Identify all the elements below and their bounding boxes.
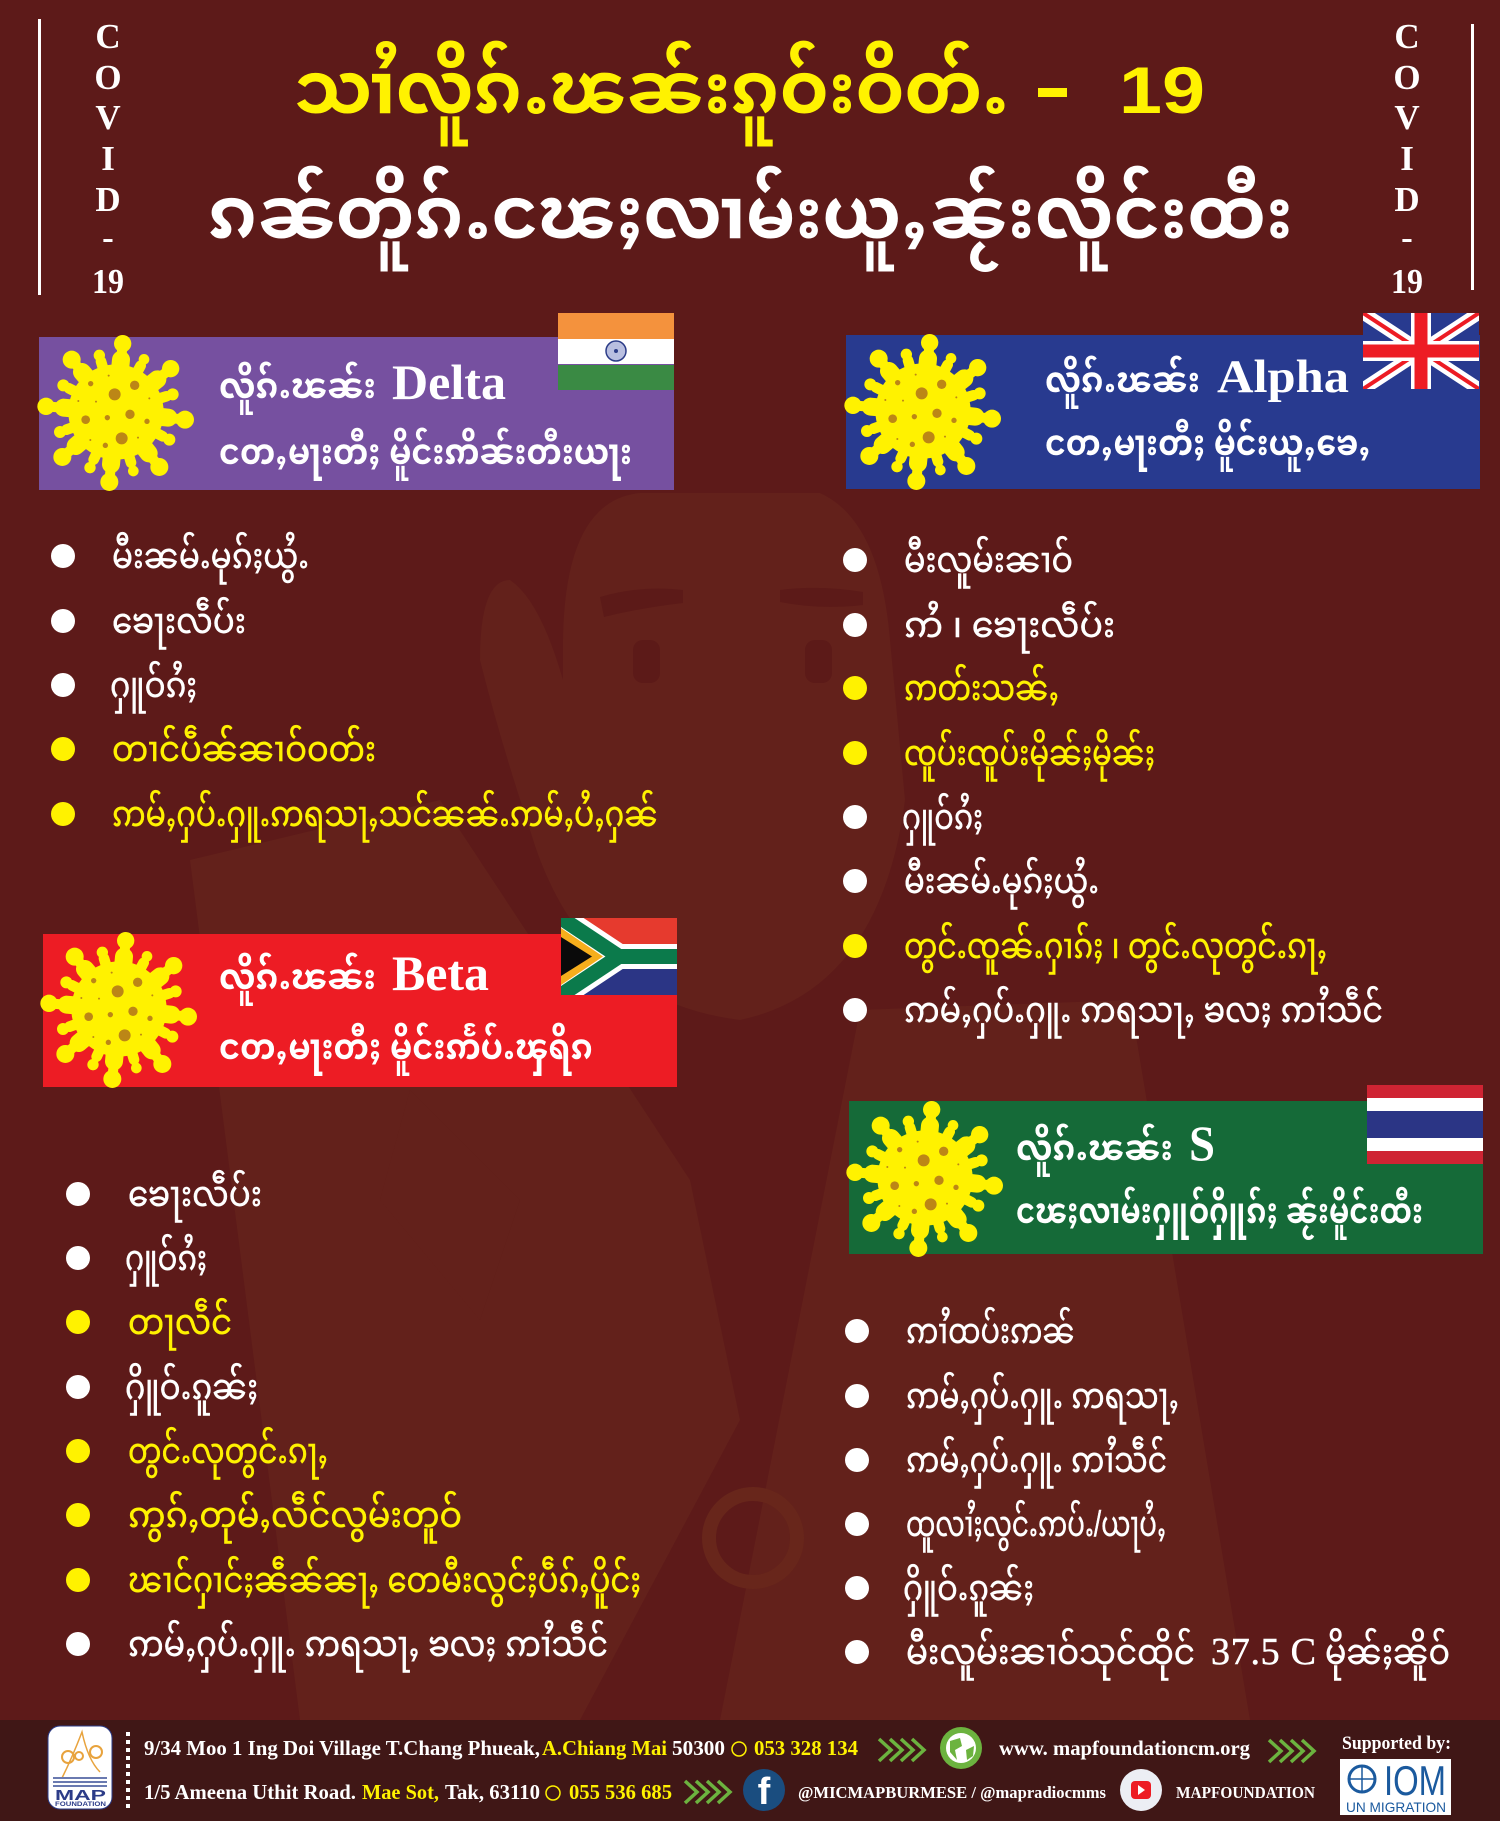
- footer: [0, 1720, 1500, 1821]
- item: ၽၢင်ႁၢင်ႈၼဵၼ်ၼႃႇ တေမီးလွင်ႈပဵၵ်ႇပိူင်ႈ: [128, 1555, 641, 1609]
- item: ႁူဝ်ၵႆႈ: [902, 792, 983, 846]
- panel: Beta variant banner: [40, 918, 677, 1088]
- flag: India: [558, 313, 674, 390]
- logo: MAP Foundation: FOUNDATION: [55, 1802, 106, 1808]
- heading: Delta: [219, 354, 506, 415]
- address: Mae Sot: 1/5 Ameena Uthit Road.: [144, 1780, 356, 1804]
- address: Mae Sot: Tak, 63110: [445, 1780, 540, 1804]
- list: Delta symptoms: [51, 531, 658, 843]
- right covid column: [1391, 17, 1474, 301]
- item: [843, 600, 1115, 654]
- heading: Beta: [219, 945, 489, 1006]
- left covid column: I: [101, 139, 115, 178]
- right covid column: C: [1394, 17, 1420, 56]
- left covid column: [38, 17, 124, 301]
- item: [51, 596, 246, 650]
- item: တႃလဵင်: [128, 1297, 232, 1351]
- address: Mae Sot: [144, 1780, 672, 1804]
- item: တွင်ႉၸူၼ်ႉႁၢၵ်ႈ ၊ တွင်ႉလုတွင်ႉၵႃႇ: [904, 921, 1327, 975]
- icon: facebook: f: [758, 1771, 771, 1813]
- arrow: chevrons: [879, 1739, 924, 1761]
- icon: virus: [37, 335, 194, 491]
- item: ဢတ်းသၼ်ႇ: [904, 663, 1059, 708]
- item: [66, 1619, 608, 1673]
- watermark: masked person: [190, 493, 1250, 1720]
- item: [845, 1371, 1179, 1425]
- address: Chiang Mai: 053 328 134: [754, 1736, 858, 1760]
- heading: S: လိူၵ်ႉၽၼ်း: [1016, 1123, 1173, 1177]
- left covid column: D: [95, 180, 121, 219]
- item: 37.5 C: [1211, 1631, 1316, 1673]
- icon: youtube: [1120, 1769, 1162, 1811]
- left covid column: 19: [92, 262, 124, 301]
- item: [51, 789, 658, 843]
- heading: Delta: လိူၵ်ႉၽၼ်း: [219, 361, 376, 415]
- item: ႁူဝ်ၵႆႈ: [125, 1233, 207, 1287]
- right covid column: D: [1394, 180, 1420, 219]
- item: ၶေႃးလဵပ်း: [128, 1169, 262, 1223]
- left covid column: V: [95, 98, 121, 137]
- heading line 1: 19: [1119, 53, 1205, 127]
- item: ႁူဝ်ၵႆႈ: [110, 660, 197, 714]
- left covid column: C: [95, 17, 121, 56]
- supported by: Supported by:: [1342, 1733, 1451, 1754]
- right covid column: I: [1400, 139, 1414, 178]
- logo: IOM: UN MIGRATION: [1346, 1799, 1446, 1815]
- item: [843, 728, 1155, 782]
- item: ၶေႃးလဵပ်း: [112, 596, 246, 650]
- icon: virus: [844, 334, 1001, 490]
- icon: globe: [940, 1727, 982, 1769]
- right covid column: -: [1401, 218, 1413, 257]
- arrow: chevrons: [685, 1781, 730, 1803]
- flag: United Kingdom: [1363, 313, 1479, 389]
- address: Chiang Mai: A.Chiang Mai: [542, 1736, 667, 1760]
- list: Alpha symptoms: [843, 535, 1383, 1039]
- address: Mae Sot: 055 536 685: [569, 1780, 672, 1804]
- item: [66, 1362, 258, 1416]
- item: မီးလူမ်းၼၢဝ်: [904, 535, 1073, 589]
- arrow: chevrons: [1269, 1740, 1314, 1762]
- heading: S: [1016, 1115, 1215, 1177]
- logo: MAP Foundation: [48, 1726, 112, 1809]
- item: [845, 1306, 1075, 1351]
- item: [843, 792, 983, 846]
- heading: Alpha: Alpha: [1217, 351, 1349, 403]
- title block: [38, 17, 1474, 301]
- item: တွင်ႉလုတွင်ႉၵႃႇ: [128, 1426, 328, 1480]
- heading line 2: ၵၼ်တိူၵ်ႉငၽႈလၢမ်းယူႇၼႂ်းလိူင်းထီး: [208, 165, 1293, 272]
- item: [66, 1233, 207, 1287]
- heading: Alpha: [1045, 351, 1349, 409]
- panel: Delta variant banner: [37, 313, 674, 491]
- heading: Delta: Delta: [392, 354, 506, 410]
- panel: S variant banner: [846, 1085, 1483, 1257]
- logo: IOM: [1340, 1757, 1451, 1815]
- item: [843, 535, 1073, 589]
- website: www. mapfoundationcm.org: [999, 1736, 1250, 1760]
- right covid column: 19: [1391, 262, 1423, 301]
- list: S symptoms: [845, 1306, 1450, 1681]
- item: [845, 1499, 1166, 1553]
- right covid column: V: [1394, 98, 1420, 137]
- item: [66, 1169, 262, 1223]
- item: [66, 1555, 641, 1609]
- item: ဢၢႆထပ်းဢၼ်: [906, 1306, 1075, 1351]
- item: ႁိူဝ်ႉၵူၼ်ႈ: [125, 1362, 258, 1416]
- item: [845, 1435, 1167, 1489]
- item: ၸူပ်းၸူပ်းမိုၼ်ႈမိုၼ်ႈ: [904, 728, 1155, 782]
- item: [51, 660, 197, 714]
- icon: virus: [40, 932, 197, 1088]
- address: Mae Sot: Mae Sot,: [362, 1780, 439, 1804]
- item: တၢင်ပဵၼ်ၼၢဝ်ဝတ်း: [112, 724, 376, 769]
- item: ဢမ်ႇႁပ်ႉႁူႉ ဢရသႃႇ ၶလႈ ဢၢႆသဵင်: [904, 985, 1383, 1039]
- item: ဢမ်ႇႁပ်ႉႁူႉ ဢရသႃႇ: [906, 1371, 1179, 1425]
- origin: India: ငတႇမႃးတီႈ မိူင်းဢိၼ်းတီးယႃး: [219, 427, 632, 481]
- left covid column: -: [102, 218, 114, 257]
- item: မီးလူမ်းၼၢဝ်သုင်ထိုင်: [906, 1627, 1195, 1681]
- youtube channel: MAPFOUNDATION: [1176, 1783, 1316, 1802]
- flag: South Africa: [561, 918, 677, 995]
- icon: facebook: [743, 1769, 785, 1813]
- item: [66, 1297, 232, 1351]
- item: [843, 663, 1059, 708]
- item: [66, 1490, 462, 1544]
- left covid column: O: [94, 58, 122, 97]
- social handles: @MICMAPBURMESE / @mapradiocmms: [798, 1783, 1106, 1802]
- icon: virus: [846, 1101, 1003, 1257]
- logo: MAP Foundation: MAP: [55, 1787, 106, 1804]
- item: [51, 724, 376, 769]
- logo: IOM: IOM: [1384, 1757, 1446, 1804]
- flag: Thailand: [1367, 1085, 1483, 1164]
- item: ဢမ်ႇႁပ်ႉႁူႉ ဢရသႃႇ ၶလႈ ဢၢႆသဵင်: [128, 1619, 608, 1673]
- item: ထူလၢႆႈလွင်ႉဢပ်ႉ/ယႃပႆႇ: [906, 1499, 1166, 1553]
- heading: S: S: [1189, 1115, 1215, 1171]
- item: ဢွၵ်ႇတုမ်ႇလဵင်လွမ်းတူဝ်: [128, 1490, 462, 1544]
- heading line 1: [294, 40, 1205, 147]
- right covid column: O: [1393, 58, 1421, 97]
- heading line 1: သၢႆလိူၵ်ႉၽၼ်းၵူဝ်းဝိတ်ႉ: [294, 40, 1009, 147]
- item: မိုၼ်ႈၼိူဝ်: [1325, 1627, 1450, 1681]
- origin: United Kingdom: ငတႇမႃးတီႈ မိူင်းယူႇၶေႇ: [1045, 418, 1371, 472]
- item: [66, 1426, 328, 1480]
- item: [843, 921, 1327, 975]
- item: [845, 1563, 1034, 1617]
- heading: Beta: Beta: [392, 945, 489, 1001]
- item: ဢမ်ႇႁပ်ႉႁူႉ ဢၢႆသဵင်: [906, 1435, 1167, 1489]
- heading: Beta: လိူၵ်ႉၽၼ်း: [219, 952, 376, 1006]
- panel: Alpha variant banner: [844, 313, 1480, 490]
- item: [51, 531, 309, 585]
- origin: South Africa: ငတႇမႃးတီႈ မိူင်းဢႅပ်ႉၾရိၵ: [219, 1022, 593, 1076]
- item: [843, 856, 1099, 910]
- dotted divider: [126, 1732, 130, 1808]
- heading: Alpha: လိူၵ်ႉၽၼ်း: [1045, 355, 1200, 409]
- item: [845, 1627, 1450, 1681]
- item: ဢမ်ႇႁပ်ႉႁူႉဢရသႃႇသင်ၼၼ်ႉဢမ်ႇပႆႇႁၼ်: [112, 789, 658, 843]
- address: Chiang Mai: [144, 1736, 858, 1760]
- item: မီးၼမ်ႉမုၵ်ႈယွႆႉ: [904, 856, 1099, 910]
- item: မီးၼမ်ႉမုၵ်ႈယွႆႉ: [112, 531, 309, 585]
- address: Chiang Mai: 50300: [672, 1736, 725, 1760]
- item: ဢႆ ၊ ၶေႃးလဵပ်း: [904, 600, 1115, 654]
- list: Beta symptoms: [66, 1169, 641, 1673]
- item: [843, 985, 1383, 1039]
- address: Chiang Mai: 9/34 Moo 1 Ing Doi Village T.Chang Phueak,: [144, 1736, 540, 1760]
- item: ႁိူဝ်ႉၵူၼ်ႈ: [903, 1563, 1034, 1617]
